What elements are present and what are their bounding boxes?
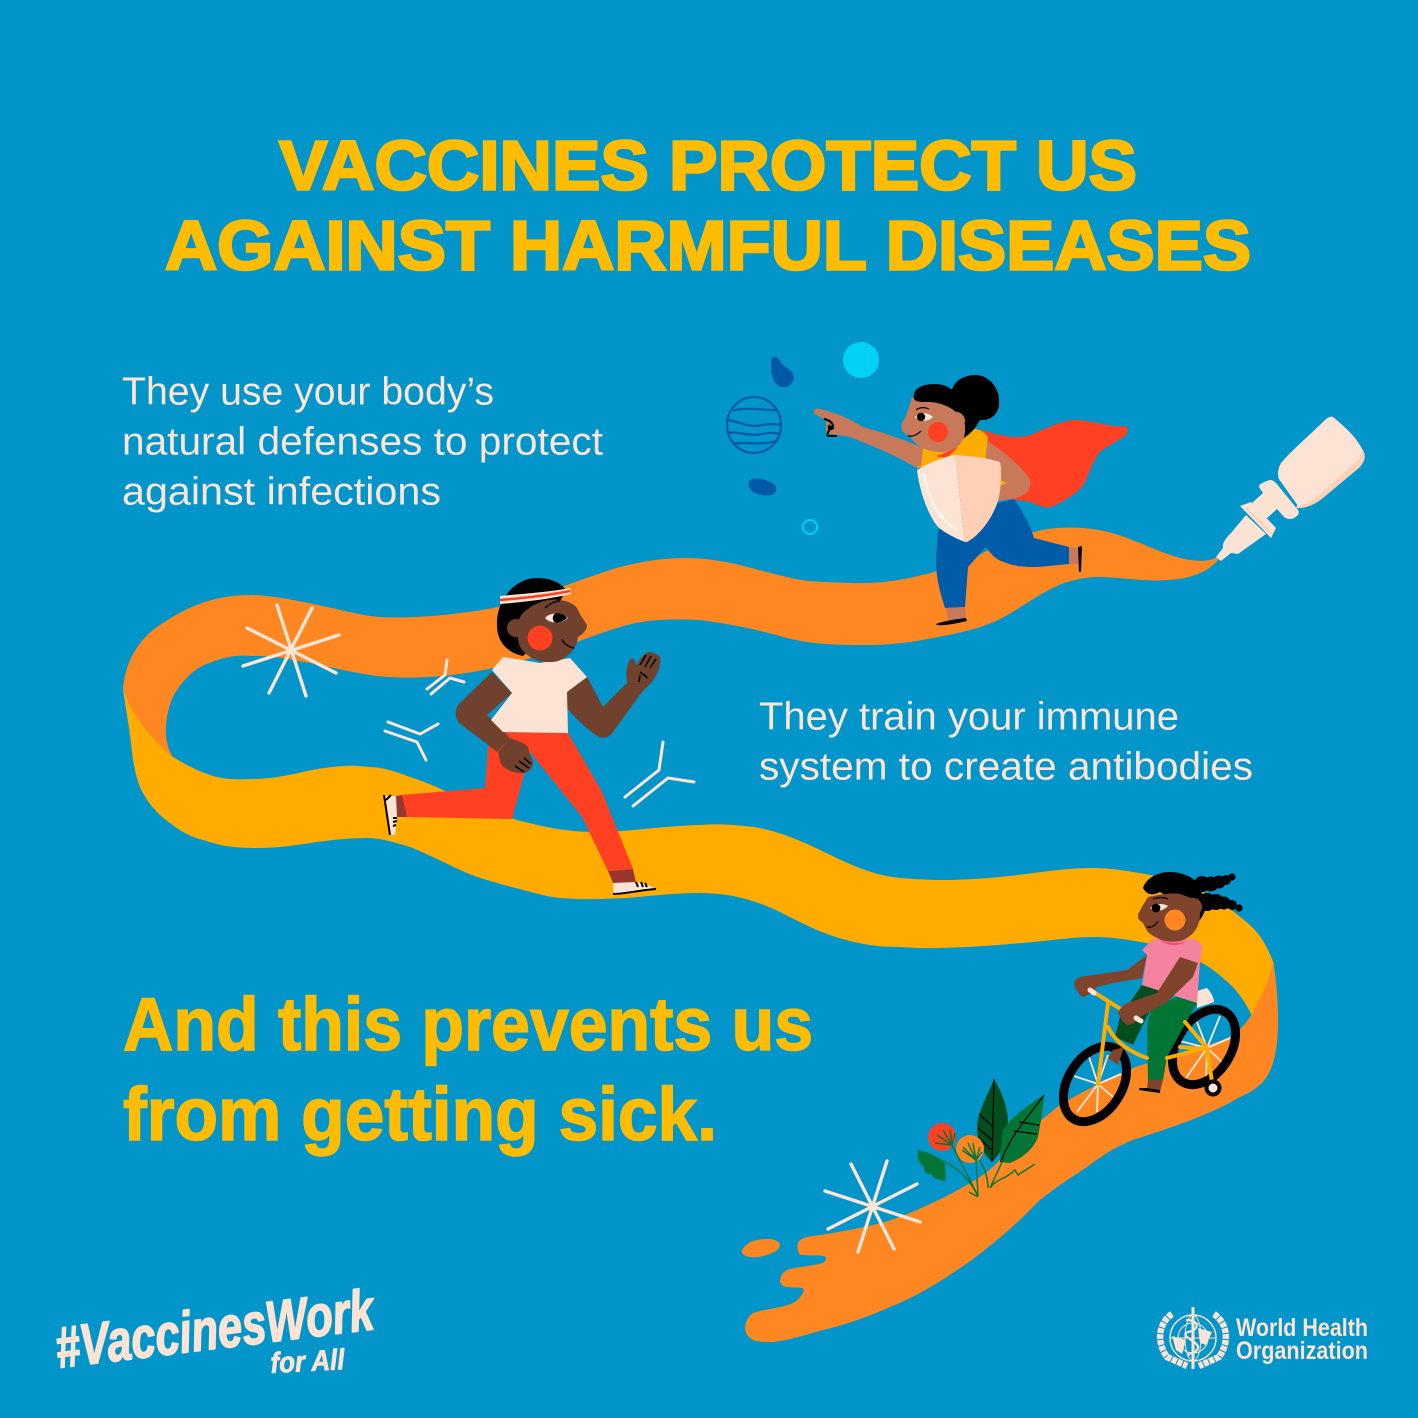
- near shoe: [1139, 1088, 1160, 1093]
- title: [165, 126, 1251, 284]
- icon: vaccine dropper bottle: [1216, 417, 1365, 561]
- shirt: [917, 429, 1007, 488]
- title: AGAINST HARMFUL DISEASES: [165, 206, 1251, 284]
- side leaf: [918, 1150, 946, 1181]
- shield highlight: [924, 474, 958, 530]
- shirt: [491, 657, 587, 733]
- WHO wordmark: World Health: [1236, 1314, 1368, 1342]
- cheek: [528, 626, 552, 650]
- red flower: [928, 1123, 956, 1151]
- stems and squiggle: [925, 1130, 1035, 1197]
- face: [901, 394, 965, 452]
- logo: VaccinesWork for All: for All: [270, 1344, 346, 1380]
- logo: VaccinesWork for All: [52, 1277, 379, 1381]
- headband: [500, 588, 571, 604]
- ear: [947, 412, 965, 430]
- seat: [1197, 988, 1214, 1008]
- far arm behind shield: [975, 440, 1030, 502]
- green leaf: [1000, 1095, 1044, 1163]
- near leg: [1147, 997, 1197, 1080]
- eye: [1150, 904, 1168, 911]
- shield: [917, 455, 965, 542]
- pants: [936, 499, 1069, 608]
- figure: running boy: [384, 578, 660, 895]
- icon: plant with flowers: [918, 1079, 1044, 1197]
- near foot: [1147, 1080, 1163, 1092]
- logo: World Health Organization: [1160, 1307, 1368, 1369]
- back shoe sole: [384, 795, 397, 835]
- WHO wordmark: Organization: [1236, 1337, 1368, 1365]
- smile and brow: [908, 408, 929, 436]
- dark leaf: [977, 1079, 1008, 1162]
- eye: [915, 413, 933, 421]
- pupil: [1152, 904, 1160, 912]
- collar: [1158, 938, 1186, 945]
- handlebar grips: [1090, 990, 1141, 1021]
- bun and back hair: [925, 375, 999, 445]
- icon: blue blob lower: [749, 478, 776, 495]
- text block: natural defenses: They use your body’s: [122, 370, 494, 414]
- ribbon: lower orange band with splash: [745, 962, 1278, 1342]
- icon: cyan circle: [843, 342, 879, 378]
- bike frame: [1092, 991, 1212, 1084]
- ear: [1184, 898, 1202, 916]
- ribbon: upper orange band: [123, 528, 1218, 757]
- far foot: [1108, 1047, 1124, 1065]
- cape: [978, 420, 1128, 508]
- text block: natural defenses: natural defenses to protect: [122, 420, 603, 464]
- front ankle: [608, 869, 636, 883]
- back shoe: [384, 796, 397, 835]
- icon: star virus on upper ribbon: [243, 605, 339, 696]
- face: [517, 600, 587, 662]
- ribbon: splash droplet: [742, 1239, 780, 1257]
- shield right half: [955, 455, 1001, 542]
- icon: cyan ring: [803, 520, 817, 534]
- germs floating in front of the superhero: [727, 342, 879, 534]
- hair and braids: [1143, 872, 1243, 927]
- icon: striped planet germ: [727, 397, 781, 453]
- front shoe sole: [613, 882, 656, 894]
- far arm: [1074, 955, 1147, 997]
- rear wheel: [1159, 998, 1249, 1096]
- front shoe: [613, 882, 655, 895]
- closing statement: [123, 982, 813, 1156]
- leaf veins: [978, 1079, 1044, 1162]
- WHO wordmark: [1236, 1314, 1368, 1365]
- text block: natural defenses: [122, 370, 603, 514]
- ribbon: middle yellow band: [123, 688, 1274, 1016]
- back ankle: [396, 795, 407, 817]
- pupil: [917, 413, 925, 421]
- neck bow: [936, 447, 958, 457]
- headband stripe: [500, 591, 570, 600]
- near arm: [1118, 957, 1198, 1025]
- closing statement: And this prevents us: [123, 982, 813, 1066]
- hand left: [498, 738, 533, 773]
- text block: immune system: [759, 696, 1253, 788]
- icon: star virus near splash: [825, 1161, 920, 1252]
- arm left: [456, 672, 512, 752]
- icon: blue blob top: [771, 357, 794, 387]
- far leg: [1115, 985, 1160, 1045]
- arm right and hand: [567, 652, 660, 738]
- icon: antibodies: [385, 660, 694, 806]
- logo: VaccinesWork for All: #VaccinesWork: [52, 1277, 379, 1381]
- smile and brow: [1147, 898, 1168, 927]
- face: [1138, 893, 1200, 942]
- cheek: [928, 422, 948, 442]
- ear: [507, 619, 525, 637]
- smile and brow: [545, 601, 574, 648]
- hand right lines: [639, 655, 656, 682]
- text block: immune system: system to create antibodies: [759, 746, 1253, 788]
- training wheel: [1206, 1082, 1220, 1094]
- front wheel: [1050, 1035, 1140, 1133]
- pointing arm: [814, 409, 923, 467]
- legs and shoes: [946, 547, 1079, 621]
- figure: girl on bicycle: [1050, 872, 1249, 1133]
- figure: superhero girl with shield: [814, 375, 1128, 625]
- shirt: [1142, 939, 1202, 1003]
- trousers: [402, 732, 633, 871]
- ribbon: paint stream: [123, 528, 1278, 1342]
- eye white: [545, 614, 568, 622]
- WHO emblem: [1160, 1307, 1226, 1369]
- finger details: [824, 419, 837, 436]
- text block: natural defenses: against infections: [122, 470, 441, 514]
- front hair: [914, 384, 962, 413]
- text block: immune system: They train your immune: [759, 696, 1179, 738]
- hand left fingers: [515, 758, 531, 772]
- hair: [497, 578, 566, 656]
- cheek: [1164, 910, 1186, 930]
- orange flower: [956, 1135, 984, 1163]
- title: VACCINES PROTECT US: [279, 126, 1137, 204]
- closing statement: from getting sick.: [123, 1072, 717, 1156]
- pupil: [553, 613, 567, 623]
